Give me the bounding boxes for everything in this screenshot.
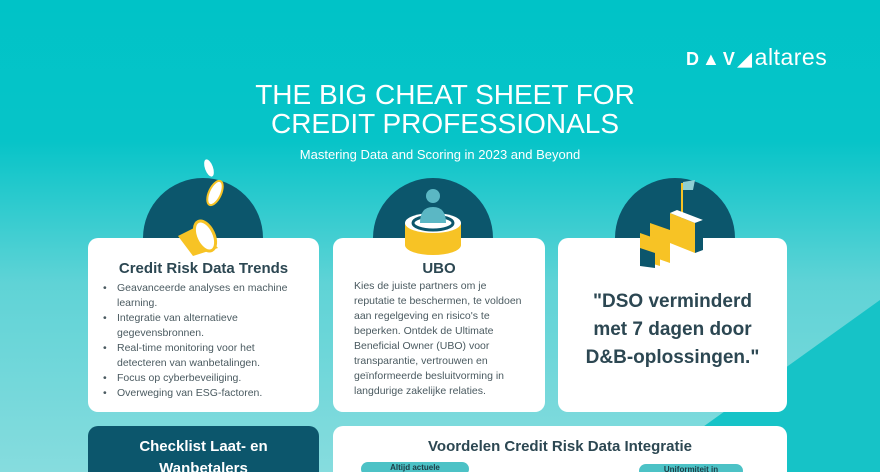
quote text	[586, 291, 759, 368]
list: trends: Geavanceerde analyses en machine learning.	[117, 282, 287, 309]
title	[255, 79, 635, 139]
quote text: D&B-oplossingen."	[586, 347, 759, 368]
heading: checklist	[139, 438, 268, 472]
heading: UBO: UBO	[422, 260, 456, 277]
icon: UBO person	[405, 189, 461, 255]
text: UBO: Kies de juiste partners om je reputatie te beschermen, te voldoen aan regelgeving en risico's te beperken. Ontdek de Ultimate Beneficial Owner (UBO) voor transparantie, vertrouwen en geïnformeerde besluitvorming in langdurige zakelijke relaties.	[354, 280, 522, 397]
panel: checklist	[88, 426, 319, 472]
panel: quote	[558, 238, 787, 412]
list: trends: Real-time monitoring voor het detecteren van wanbetalingen.	[117, 342, 260, 369]
list: trends: Focus op cyberbeveiliging.	[117, 372, 241, 384]
heading: trends: Credit Risk Data Trends	[119, 260, 288, 277]
semicircle backgrounds	[143, 178, 735, 238]
list: trends	[103, 282, 287, 399]
heading: voordelen: Voordelen Credit Risk Data Integratie	[428, 438, 692, 455]
panel: credit risk data trends	[88, 238, 319, 412]
panel: UBO	[333, 238, 545, 412]
pill: altijd actuele	[361, 462, 469, 472]
list: trends: Integratie van alternatieve gegevensbronnen.	[117, 312, 238, 339]
panel: voordelen	[333, 426, 787, 472]
pill: uniformiteit	[639, 464, 743, 472]
list: trends: Overweging van ESG-factoren.	[117, 387, 262, 399]
subtitle: Mastering Data and Scoring in 2023 and Beyond	[300, 147, 580, 162]
title: CREDIT PROFESSIONALS	[271, 108, 619, 139]
logo: D▲V◢altares	[686, 44, 827, 70]
icon: stairs	[640, 180, 703, 268]
quote text: met 7 dagen door	[593, 319, 752, 340]
icon: coins	[178, 159, 224, 256]
heading: checklist: Checklist Laat- en	[139, 438, 268, 455]
pill: altijd actuele: Altijd actuele	[390, 463, 440, 472]
title: THE BIG CHEAT SHEET FOR	[255, 79, 635, 110]
quote text: "DSO verminderd	[593, 291, 752, 312]
